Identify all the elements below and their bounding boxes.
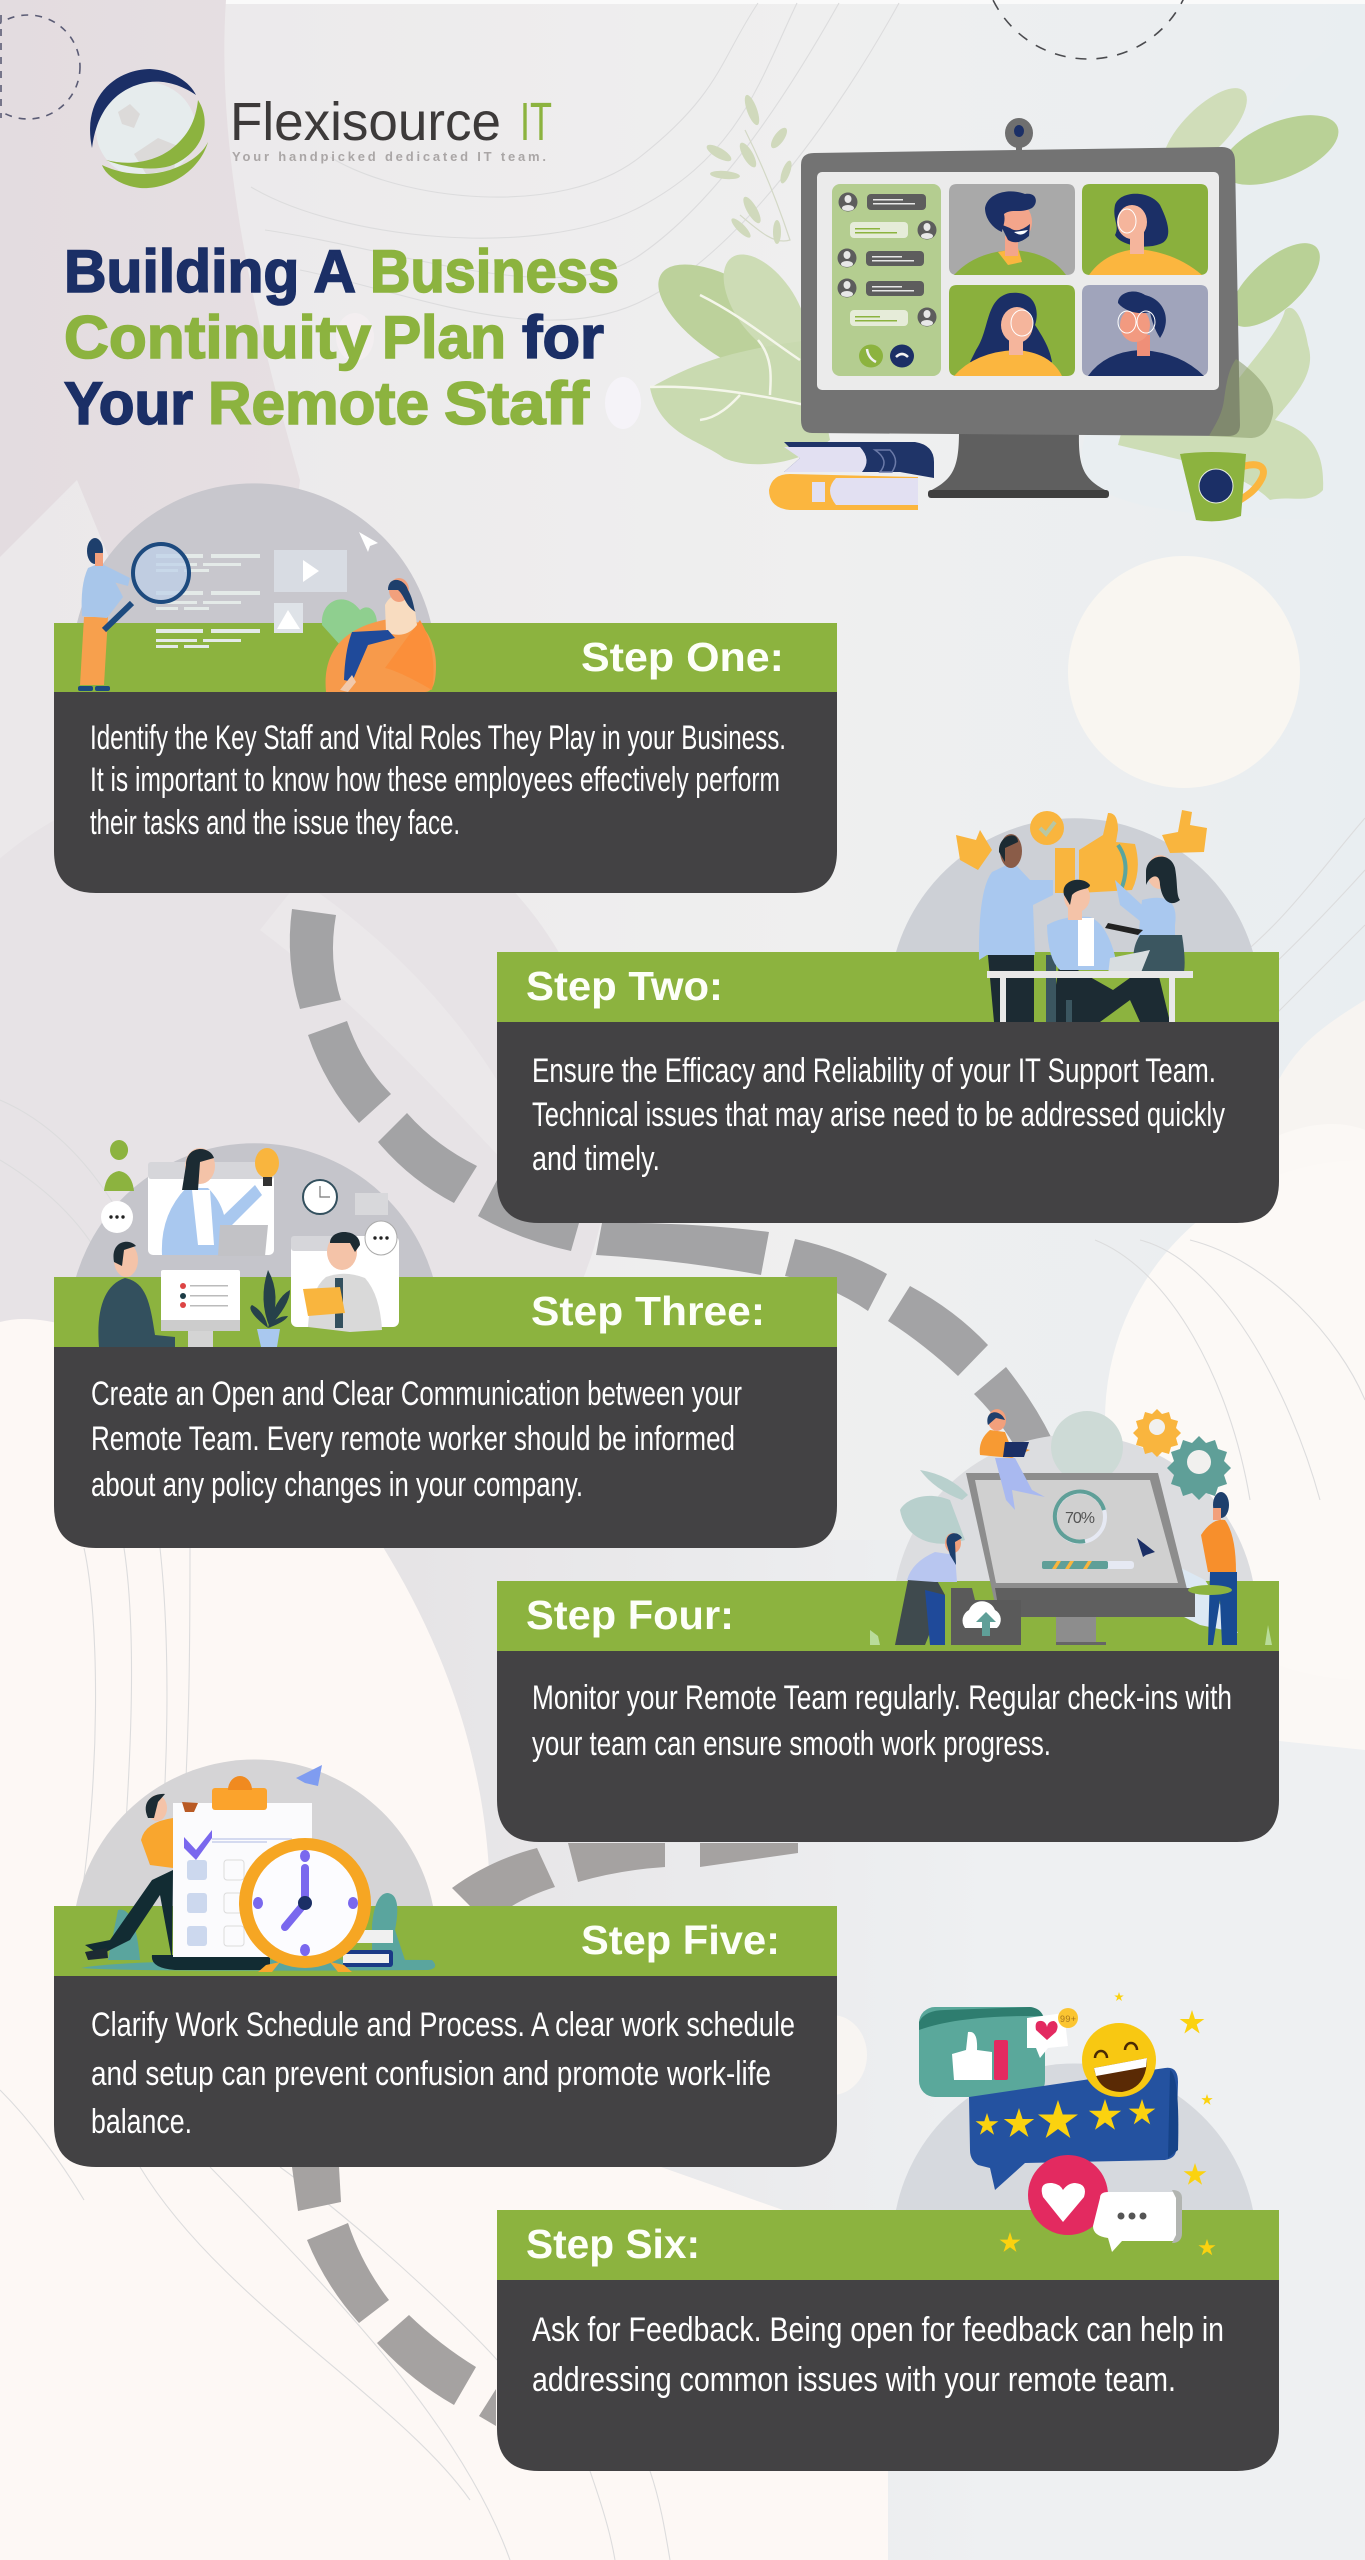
body panel — [497, 1022, 1279, 1223]
heading: Step Four: — [526, 1592, 734, 1638]
monitor body — [801, 147, 1240, 436]
video tile: long-haired woman — [949, 285, 1075, 376]
panel: step four — [497, 1409, 1279, 1842]
dome — [896, 2064, 1253, 2210]
panel: step six — [497, 1992, 1279, 2471]
body text: about any policy changes in your company. — [91, 1466, 583, 1504]
body text: Clarify Work Schedule and Process. A clear work schedule — [91, 2006, 795, 2044]
leaves behind monitor — [641, 76, 1348, 500]
webcam — [1005, 118, 1033, 153]
body text: and timely. — [532, 1140, 660, 1178]
body text: balance. — [91, 2103, 192, 2141]
panel: step five — [54, 1760, 837, 2167]
body panel — [54, 692, 837, 893]
illustration: remote call windows — [98, 1140, 399, 1347]
dome — [896, 1435, 1253, 1581]
video tile: woman with headset — [1082, 184, 1208, 275]
panel: step three — [54, 1140, 837, 1548]
video tile: bearded man — [949, 184, 1075, 275]
chat panel — [832, 184, 941, 376]
body panel — [497, 1651, 1279, 1842]
body text — [91, 1375, 742, 1504]
illustration: progress monitor with team — [870, 1409, 1272, 1645]
body text: Create an Open and Clear Communication between your — [91, 1375, 742, 1413]
heading: Step One: — [581, 634, 784, 680]
body text: It is important to know how these employees effectively perform — [90, 761, 780, 799]
logo: IT — [520, 92, 552, 152]
stand — [928, 432, 1109, 492]
body text: Identify the Key Staff and Vital Roles They Play in your Business. — [90, 719, 786, 757]
title: Building A — [64, 238, 356, 305]
title: Remote — [208, 370, 429, 437]
header band — [54, 1277, 837, 1347]
leaf overlapping monitor corner — [1209, 359, 1273, 438]
title: Plan — [382, 304, 506, 371]
body text — [91, 2006, 795, 2141]
dome — [76, 1143, 433, 1277]
heading: Step Two: — [526, 963, 723, 1009]
header band — [497, 2210, 1279, 2280]
title: for — [522, 304, 604, 371]
body panel — [54, 1976, 837, 2167]
body panel — [54, 1347, 837, 1548]
road: lower dashed paths — [292, 1843, 798, 2426]
header band — [497, 1581, 1279, 1651]
dome — [77, 483, 431, 623]
body text — [90, 719, 786, 842]
title: Staff — [444, 370, 590, 437]
heading: Step Three: — [531, 1288, 765, 1334]
title: Business — [370, 238, 619, 305]
body text — [532, 2311, 1224, 2399]
body text — [532, 1679, 1232, 1763]
screen — [817, 172, 1219, 390]
video tile: man with glasses — [1082, 285, 1208, 376]
panel: step two — [497, 810, 1279, 1223]
body text: your team can ensure smooth work progress. — [532, 1725, 1051, 1763]
title: Continuity — [64, 304, 372, 371]
hero illustration: video call monitor — [641, 76, 1348, 521]
mug — [1180, 452, 1263, 521]
body text — [532, 1052, 1225, 1178]
dome — [76, 1760, 433, 1906]
sprig — [704, 93, 794, 244]
heading: Step Six: — [526, 2221, 700, 2267]
logo: Your handpicked dedicated IT team. — [232, 149, 546, 164]
title: Your — [64, 370, 193, 437]
body text: their tasks and the issue they face. — [90, 804, 460, 842]
illustration: progress monitor with team: 70% — [1065, 1510, 1095, 1527]
body text: and setup can prevent confusion and promote work-life — [91, 2055, 771, 2093]
illustration: clipboard and clock — [81, 1765, 435, 1972]
body panel — [497, 2280, 1279, 2471]
illustration: team with thumbs up — [956, 810, 1207, 1022]
header band — [497, 952, 1279, 1022]
header band — [54, 623, 837, 692]
panel: step one — [54, 483, 837, 893]
dome — [896, 818, 1253, 952]
body text: Remote Team. Every remote worker should be informed — [91, 1420, 735, 1458]
logo: Flexisource — [230, 92, 501, 152]
illustration: reviews and reactions — [919, 1992, 1216, 2255]
logo — [90, 69, 552, 188]
illustration: analyst with magnifier and woman on beanbag — [78, 532, 436, 692]
icon: globe logo — [90, 69, 208, 188]
body text: addressing common issues with your remote team. — [532, 2361, 1176, 2399]
title — [64, 238, 619, 437]
header band — [54, 1906, 837, 1976]
road: upper dashed path — [290, 909, 1058, 1463]
books — [769, 442, 934, 510]
heading: Step Five: — [581, 1917, 780, 1963]
illustration: reviews and reactions: 99+ — [1060, 2014, 1076, 2024]
body text: Ask for Feedback. Being open for feedback can help in — [532, 2311, 1224, 2349]
